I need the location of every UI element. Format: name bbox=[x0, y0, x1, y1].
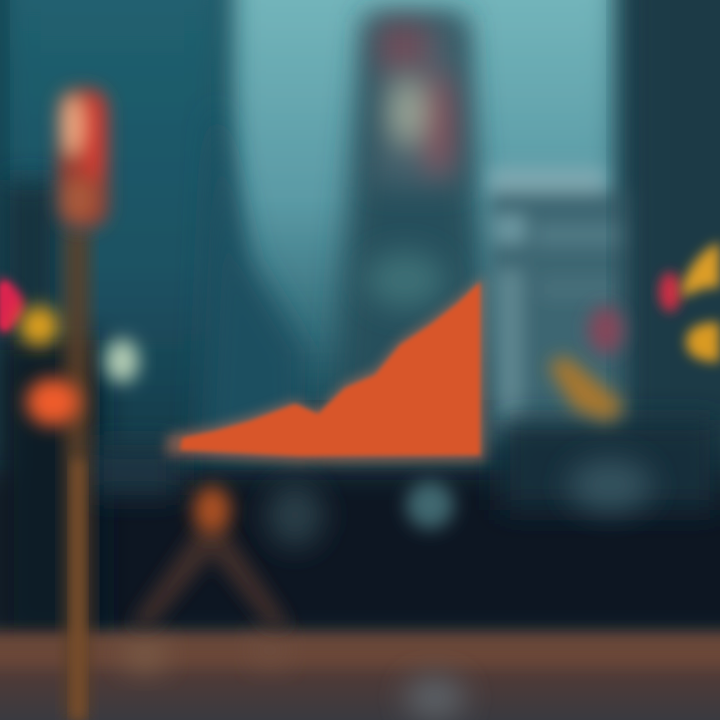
far right dark building bbox=[625, 0, 720, 480]
street floor bbox=[0, 632, 720, 720]
street crowd bbox=[0, 340, 720, 640]
tower body bbox=[330, 15, 482, 460]
red banner on post bbox=[58, 88, 108, 228]
right grey building bbox=[490, 168, 640, 440]
orange rising area chart bbox=[165, 276, 486, 464]
tower lower panel bbox=[365, 252, 445, 308]
left building bbox=[0, 0, 305, 460]
center tower bbox=[330, 15, 482, 460]
lamp post bbox=[58, 88, 108, 720]
tower billboard bbox=[372, 20, 460, 187]
walking person bbox=[130, 486, 290, 628]
left traffic lights bbox=[0, 276, 139, 426]
right street lights bbox=[548, 242, 720, 422]
